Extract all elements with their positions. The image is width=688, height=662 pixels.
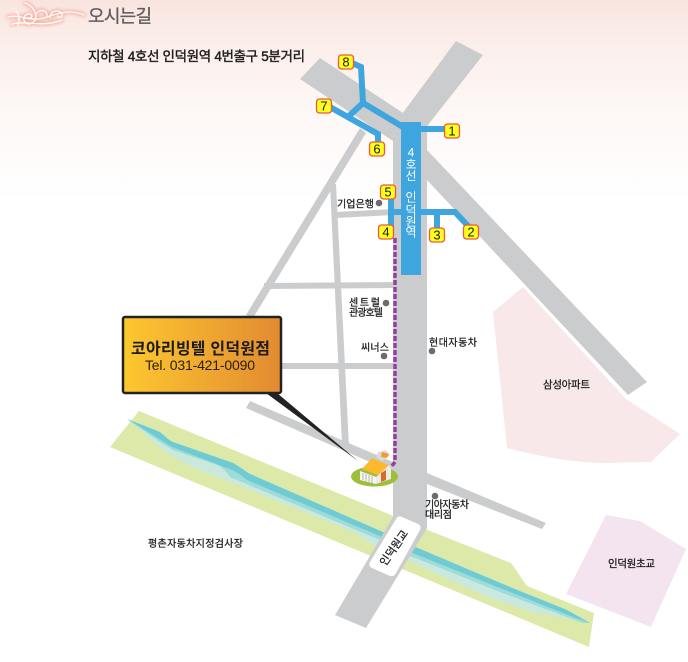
exit badges: 5 bbox=[384, 184, 392, 200]
landmark: central tourist hotel: 센트럴 bbox=[349, 296, 380, 309]
landmark: kia motors dealer: 대리점 bbox=[425, 509, 452, 521]
icon: house on green lawn bbox=[351, 450, 398, 486]
upper left road bbox=[300, 58, 427, 150]
exit badges: 2 bbox=[467, 224, 475, 240]
exit badges bbox=[316, 54, 478, 242]
green riverside strip bbox=[110, 411, 594, 647]
lower left road bbox=[246, 401, 393, 472]
subtitle: subway directions: 지하철 4호선 인덕원역 4번출구 5분거리 bbox=[88, 49, 305, 64]
landmark: inspection center: 평촌자동차지정검사장 bbox=[148, 538, 243, 550]
callout: hotel name and phone: 코아리빙텔 인덕원점 bbox=[131, 340, 270, 358]
landmark: hyundai motors bbox=[429, 337, 477, 354]
landmark: kia motors dealer: 기아자동차 bbox=[425, 499, 469, 511]
landmark: IBK bank: 기업은행 bbox=[337, 198, 374, 210]
station bar: 원 bbox=[405, 214, 417, 228]
landmark: cinus bbox=[361, 342, 389, 359]
station bar: 역 bbox=[405, 226, 417, 240]
thin diagonal road bbox=[246, 128, 366, 318]
bridge label: 인덕원교 bbox=[377, 528, 411, 568]
lower right road bbox=[427, 473, 546, 529]
bridge label bbox=[369, 516, 421, 576]
landmark: kia motors dealer bbox=[425, 493, 469, 521]
upper right road bbox=[402, 41, 483, 130]
river bbox=[127, 419, 590, 623]
area: samsung apartment: 삼성아파트 bbox=[543, 379, 590, 391]
exit badges: 3 bbox=[433, 228, 441, 242]
subway station and exits bbox=[316, 54, 478, 275]
area: samsung apartment bbox=[493, 287, 680, 463]
station bar: 4 bbox=[408, 146, 415, 160]
exit badges: 7 bbox=[320, 98, 328, 114]
landmark: hyundai motors: 현대자동차 bbox=[429, 337, 477, 349]
header ornament bbox=[8, 3, 84, 25]
exit lines bbox=[330, 63, 469, 232]
landmark: IBK bank bbox=[337, 198, 382, 210]
main road bbox=[335, 125, 427, 628]
cross street three bbox=[282, 363, 393, 369]
thin vertical road bbox=[330, 184, 349, 447]
walking route bbox=[391, 238, 395, 467]
station bar: 덕 bbox=[405, 204, 417, 218]
cross street two bbox=[264, 282, 393, 289]
lower right diagonal road bbox=[427, 150, 647, 395]
exit badges: 8 bbox=[342, 54, 350, 70]
landmark: central tourist hotel bbox=[349, 296, 389, 319]
station bar bbox=[401, 122, 421, 275]
cross street one bbox=[335, 209, 393, 218]
callout: hotel name and phone: Tel. 031-421-0090 bbox=[145, 357, 255, 373]
station bar: 인 bbox=[405, 190, 417, 204]
landmark: cinus: 씨너스 bbox=[361, 342, 389, 354]
area: elementary school: 인덕원초교 bbox=[608, 558, 655, 570]
callout: hotel name and phone bbox=[123, 317, 281, 393]
callout pointer bbox=[266, 393, 358, 461]
station bar: 호 bbox=[405, 158, 417, 172]
title: 오시는길 bbox=[88, 6, 152, 26]
road network bbox=[246, 41, 647, 628]
exit badges: 4 bbox=[382, 224, 390, 240]
exit badges: 6 bbox=[373, 142, 381, 156]
station bar: 선 bbox=[405, 169, 417, 183]
landmark: central tourist hotel: 관광호텔 bbox=[349, 307, 383, 319]
area: elementary school bbox=[566, 515, 686, 627]
exit badges: 1 bbox=[448, 124, 456, 138]
